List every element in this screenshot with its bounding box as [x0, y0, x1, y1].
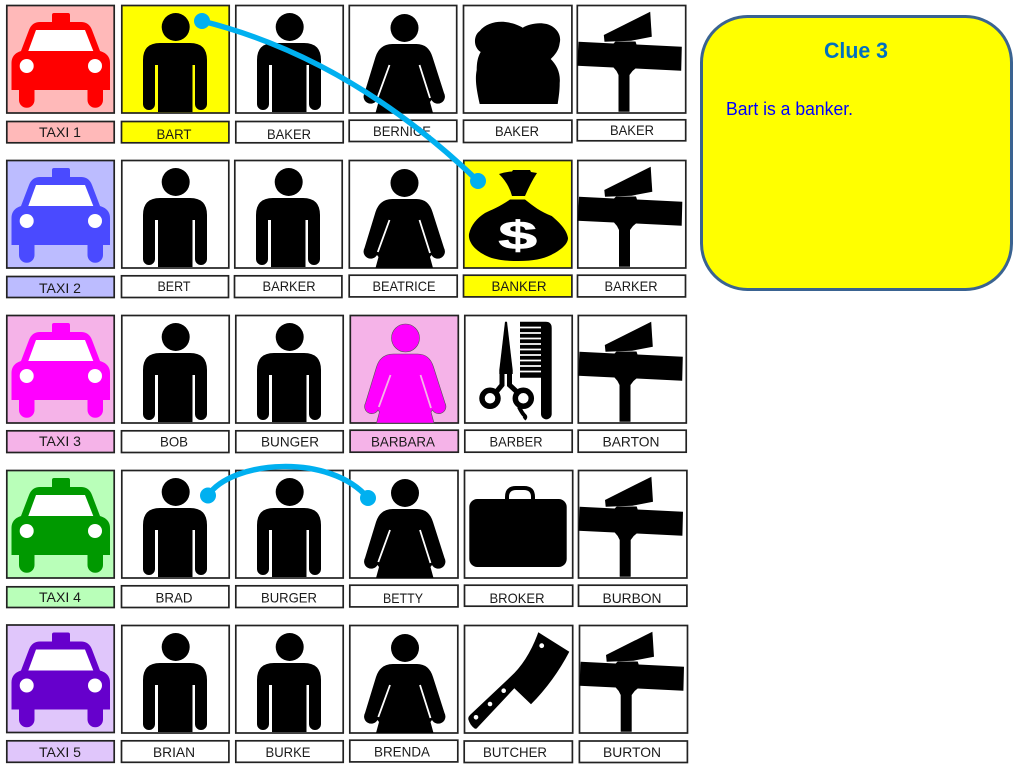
label: street Barton [578, 430, 686, 452]
row: taxi 2 [7, 160, 686, 298]
icon: briefcase [464, 470, 573, 578]
icon: woman Barbara [350, 316, 458, 423]
label: Banker: BANKER [492, 278, 546, 294]
label: Bernice: BERNICE [373, 123, 431, 139]
icon: person Bart [122, 6, 229, 113]
label: Burger [236, 586, 343, 608]
label: taxi 2 [7, 276, 114, 298]
icon: taxi 3 [7, 316, 114, 423]
label: Bernice [349, 120, 457, 142]
label: Brenda: BRENDA [374, 744, 431, 760]
icon: street sign Burton [579, 626, 688, 733]
label: Betty: BETTY [383, 590, 424, 606]
label: street Baker: BAKER [610, 122, 654, 138]
icon: person Brian [122, 626, 229, 733]
label: Bunger [236, 431, 343, 452]
icon: street sign Barker [578, 160, 686, 268]
label: street Barton: BARTON [602, 434, 660, 450]
icon: person Barker [235, 160, 342, 268]
label: Banker [464, 275, 572, 297]
label: Barber: BARBER [490, 434, 542, 450]
label: Bert [122, 276, 228, 298]
label: Barker [234, 276, 342, 298]
label: Burger: BURGER [261, 590, 317, 606]
label: Burke: BURKE [266, 744, 310, 760]
row: taxi 3 [7, 316, 686, 452]
label: Bob [122, 431, 229, 452]
label: taxi 4 [7, 587, 114, 608]
icon: person Bob [122, 316, 229, 423]
row: taxi 5 [7, 625, 688, 762]
label: street Burton: BURTON [603, 744, 661, 760]
label: Bert: BERT [158, 278, 191, 294]
label: Brian [122, 741, 229, 762]
label: Betty [350, 585, 458, 607]
label: street Barker [578, 275, 686, 297]
icon: taxi 1 [7, 6, 114, 113]
label: Barker: BARKER [262, 278, 316, 294]
label: Broker: BROKER [490, 590, 544, 606]
icon: scissors and comb [465, 316, 572, 423]
label: Brad [122, 586, 229, 608]
label: taxi 2: TAXI 2 [39, 280, 81, 296]
icon: street sign Baker [577, 6, 686, 113]
label: Barber [465, 430, 572, 452]
icon: person Brad [122, 470, 229, 578]
label: Barbara: BARBARA [371, 434, 436, 450]
label: Broker [464, 585, 573, 606]
icon: person Baker [236, 6, 343, 113]
label: street Baker [577, 120, 686, 141]
label: street Barker: BARKER [604, 278, 658, 294]
label: Burke [236, 741, 343, 762]
label: taxi 1: TAXI 1 [39, 124, 81, 140]
label: Baker [236, 122, 343, 143]
icon: taxi 4 [7, 470, 114, 578]
label: Bart: BART [156, 126, 192, 142]
icon: woman Brenda [350, 626, 458, 733]
label: Barbara [350, 430, 458, 452]
panel: clue 3 [702, 16, 1012, 290]
icon: person Burke [236, 626, 343, 733]
label: taxi 5 [7, 741, 114, 762]
label: Bunger: BUNGER [261, 434, 319, 450]
label: taxi 1 [7, 122, 114, 143]
icon: woman Beatrice [349, 160, 457, 268]
icon: bread [464, 6, 572, 113]
label: Butcher [464, 741, 572, 762]
icon: woman Bernice [349, 6, 457, 113]
label: street Burton [579, 741, 687, 762]
clue text: Bart is a banker. [726, 99, 853, 119]
label: Beatrice [349, 275, 457, 297]
icon: cleaver [464, 626, 573, 733]
icon: taxi 5 [7, 625, 114, 732]
icon: woman Betty [350, 470, 458, 578]
label: taxi 3: TAXI 3 [39, 433, 81, 449]
label: occupation Baker: BAKER [495, 123, 539, 139]
label: Baker: BAKER [267, 126, 311, 142]
label: Brian: BRIAN [153, 744, 195, 760]
icon: person Bunger [236, 316, 343, 423]
clue heading: Clue 3 [824, 38, 888, 63]
label: Brad: BRAD [156, 590, 192, 606]
arrow: Brad to Betty [200, 467, 376, 506]
label: Bart [122, 122, 229, 143]
label: street Burbon [578, 585, 687, 606]
label: Beatrice: BEATRICE [372, 278, 436, 294]
icon: taxi 2 [7, 160, 114, 268]
row: taxi 1 [7, 6, 686, 143]
label: street Burbon: BURBON [602, 590, 662, 606]
label: Butcher: BUTCHER [483, 744, 547, 760]
label: occupation Baker [464, 120, 572, 142]
label: taxi 3 [7, 431, 114, 452]
icon: person Bert [122, 160, 229, 268]
label: taxi 5: TAXI 5 [39, 744, 81, 760]
icon: money bag: $ [498, 213, 537, 258]
icon: money bag [464, 160, 572, 268]
row: taxi 4 [7, 470, 687, 608]
icon: street sign Burbon [578, 470, 687, 578]
icon: person Burger [236, 470, 343, 578]
label: Brenda [350, 740, 458, 762]
label: Bob: BOB [160, 434, 188, 450]
arrow: Bart to Banker [194, 13, 486, 189]
label: taxi 4: TAXI 4 [39, 589, 81, 605]
icon: street sign Barton [578, 316, 686, 423]
